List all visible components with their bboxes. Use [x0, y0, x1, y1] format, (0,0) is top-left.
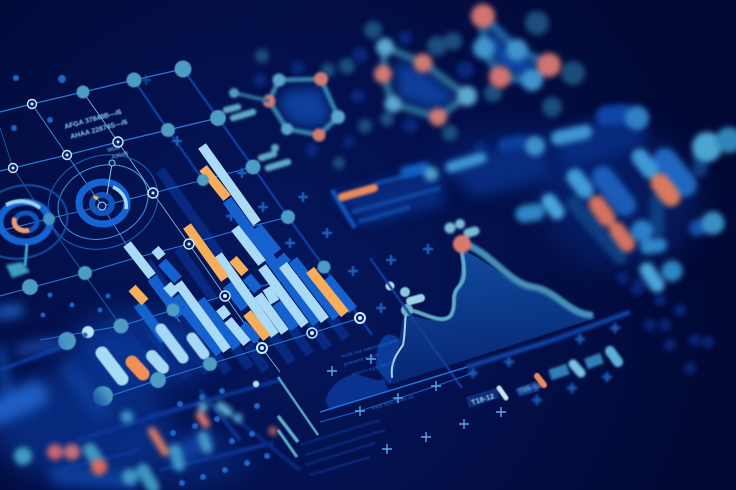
thin teal bars — [278, 377, 318, 457]
network shape: middle polygon — [374, 38, 477, 126]
axis crosses — [327, 354, 506, 454]
blurred cluster: far right — [524, 127, 736, 285]
small text block below chart — [341, 338, 415, 412]
network shape: top polygon — [471, 4, 561, 91]
bar chart: blurred foreground bars — [82, 326, 204, 379]
glow behind blurred foreground — [0, 130, 700, 488]
area chart: line — [392, 246, 590, 377]
network shape: left pentagon — [229, 72, 345, 142]
bottom stripes — [300, 420, 385, 475]
grid nodes: soft teal — [22, 60, 330, 406]
blurred foreground: dots and bars — [14, 402, 277, 487]
bar chart: blue bars — [138, 200, 353, 353]
grid: dim backdrop columns under the bar chart — [130, 170, 346, 378]
small text block below chart: vitae sem dolor sit — [371, 394, 415, 412]
area chart: filled region — [392, 250, 596, 384]
target dial: left — [0, 175, 76, 278]
small text block below chart: nulla nec bibendum ante — [341, 338, 399, 360]
text label: dial readings: AHAA 22874S—/6 — [70, 119, 128, 141]
area chart: mounds — [325, 335, 404, 410]
small light dot — [253, 381, 259, 387]
small text block below chart: praesent turpis — [343, 352, 379, 368]
bar chart: orange bars — [132, 168, 345, 338]
small text block below chart: mauris eget libero — [351, 360, 394, 378]
text label: dial readings: MGB — [107, 145, 121, 154]
network: deep blue dots — [253, 31, 714, 374]
small dim grid dots — [11, 75, 270, 486]
blurred pills: middle right — [405, 106, 649, 181]
text label: dial readings — [64, 109, 129, 161]
legend: pills and date labels: T18-12 — [470, 391, 495, 407]
grid nodes: white rings — [8, 100, 365, 353]
target dial: centre — [35, 140, 171, 264]
grid: perspective lines — [0, 69, 372, 396]
network: dim background dots — [255, 11, 585, 169]
blurred table with orange bar — [332, 170, 440, 228]
blurred axis crosses — [468, 323, 620, 405]
blurred label pills — [226, 107, 288, 168]
legend: pills and date labels — [466, 351, 618, 408]
legend: pills and date labels: T05-12 — [517, 380, 542, 396]
bar chart: light bars — [127, 146, 325, 350]
axis lines — [320, 312, 630, 422]
text label: dial readings: A204B — [111, 151, 129, 161]
text label: dial readings: AFGA 37848B—/6 — [64, 109, 122, 131]
blurred foreground: left blue masses — [0, 310, 205, 480]
area chart: peak markers — [444, 219, 475, 253]
blurred right panels — [330, 105, 645, 225]
area chart: lower markers — [370, 258, 462, 388]
grid: blurred foreground lines — [0, 345, 300, 470]
blurred network fills — [277, 25, 545, 128]
background crosses — [141, 75, 433, 313]
